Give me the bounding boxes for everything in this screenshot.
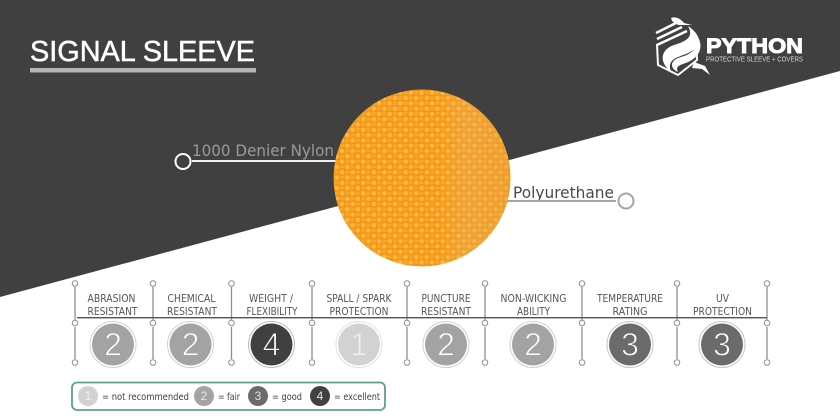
rating: weight / flexibility 4: 4 (263, 326, 280, 362)
rating: weight / flexibility 4 (246, 293, 298, 368)
legend: not recommended: = not recommended (102, 392, 189, 403)
callout: Polyurethane: Polyurethane (513, 183, 614, 202)
fabric swatch circle (334, 90, 510, 266)
rating: temperature rating 3: 3 (621, 326, 639, 362)
rating: uv protection 3: UV (716, 293, 730, 305)
legend: fair (194, 386, 241, 406)
rating: chemical resistant 2 (167, 293, 217, 368)
legend (72, 382, 385, 410)
rating: chemical resistant 2: 2 (182, 326, 199, 362)
rating: puncture resistant 2: RESISTANT (421, 306, 471, 318)
rating: chemical resistant 2: RESISTANT (167, 306, 217, 318)
rating: puncture resistant 2: 2 (437, 326, 455, 362)
rating: uv protection 3: PROTECTION (693, 306, 752, 318)
rating: puncture resistant 2: PUNCTURE (422, 293, 470, 305)
rating: non-wicking ability 2: 2 (524, 326, 542, 362)
rating: non-wicking ability 2: NON-WICKING (500, 293, 566, 305)
legend: fair: = fair (218, 392, 241, 403)
legend: fair: 2 (201, 389, 208, 403)
rating: uv protection 3 (693, 293, 752, 368)
dark diagonal background (0, 0, 840, 297)
rating: temperature rating 3 (596, 293, 663, 368)
logo: Python protective sleeve + covers (656, 17, 803, 75)
rating: chemical resistant 2: CHEMICAL (168, 293, 216, 305)
callout: Polyurethane (505, 183, 634, 208)
rating: weight / flexibility 4: WEIGHT / (249, 293, 293, 305)
rating: uv protection 3: 3 (713, 326, 731, 362)
legend: good: = good (272, 392, 302, 403)
legend: not recommended: 1 (85, 389, 92, 403)
rating: puncture resistant 2 (421, 293, 471, 368)
rating: temperature rating 3: TEMPERATURE (596, 293, 663, 305)
rating: spall / spark protection 1: PROTECTION (330, 306, 388, 318)
rating: abrasion resistant 2: 2 (104, 326, 122, 362)
rating: temperature rating 3: RATING (612, 306, 648, 318)
rating: abrasion resistant 2: RESISTANT (88, 306, 138, 318)
legend: good (248, 386, 302, 406)
legend: excellent: = excellent (334, 392, 380, 403)
rating: weight / flexibility 4: FLEXIBILITY (246, 306, 298, 318)
title: SIGNAL SLEEVE (30, 36, 255, 68)
rating: spall / spark protection 1: 1 (350, 326, 368, 362)
rating: spall / spark protection 1: SPALL / SPARK (326, 293, 392, 305)
rating: spall / spark protection 1 (326, 293, 392, 368)
tagline: PROTECTIVE SLEEVE + COVERS (706, 56, 803, 64)
legend: good: 3 (255, 389, 262, 403)
ratings table (72, 281, 770, 368)
rating: non-wicking ability 2 (500, 293, 566, 368)
callout: 1000 Denier Nylon: 1000 Denier Nylon (192, 141, 334, 160)
rating: abrasion resistant 2 (88, 293, 138, 368)
legend: excellent (310, 386, 380, 406)
icon: snake shield (656, 17, 710, 75)
legend: excellent: 4 (317, 389, 324, 403)
grid lines (72, 281, 770, 365)
rating: non-wicking ability 2: ABILITY (517, 306, 550, 318)
rating: abrasion resistant 2: ABRASION (88, 293, 136, 305)
legend: not recommended (78, 386, 189, 406)
wordmark: PYTHON (706, 34, 803, 58)
callout: 1000 Denier Nylon (176, 141, 337, 169)
